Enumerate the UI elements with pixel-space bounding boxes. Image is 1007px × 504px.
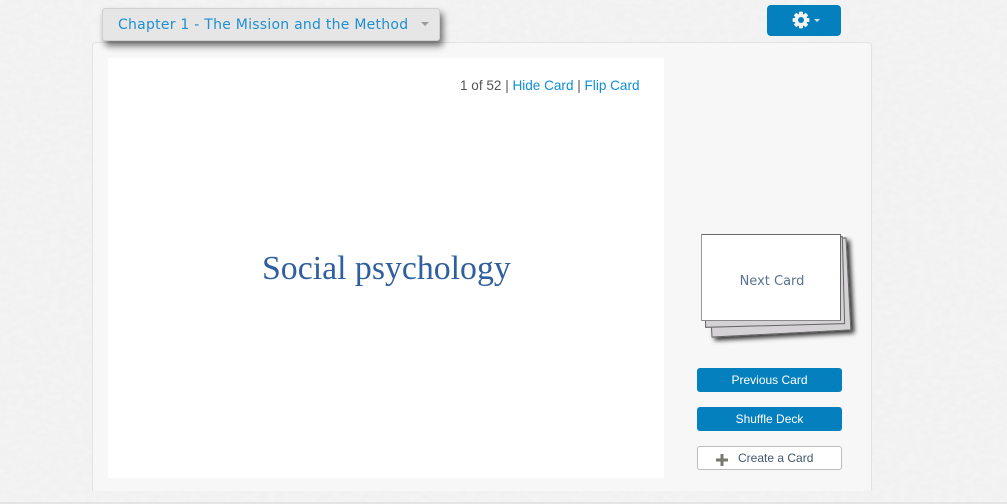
dropdown caret xyxy=(421,22,429,26)
settings caret xyxy=(814,19,820,22)
previous card button: Previous Card xyxy=(731,373,808,387)
icon: plus xyxy=(716,454,728,466)
card term: Social psychology xyxy=(262,250,511,287)
deck bottom card xyxy=(707,237,851,338)
create a card label: Create a Card xyxy=(738,451,813,465)
deck middle card xyxy=(703,236,845,328)
icon: gear xyxy=(792,12,810,28)
flashcard xyxy=(108,58,664,478)
previous card button xyxy=(697,368,842,392)
shuffle deck button: Shuffle Deck xyxy=(736,412,803,426)
chapter dropdown xyxy=(102,8,440,41)
main panel xyxy=(92,42,872,491)
deck top card xyxy=(701,234,841,321)
chapter title: Chapter 1 - The Mission and the Method xyxy=(118,17,408,33)
next card deck xyxy=(701,234,858,344)
shuffle deck button xyxy=(697,407,842,431)
next card label: Next Card xyxy=(740,274,804,289)
settings button xyxy=(767,5,841,36)
create a card button xyxy=(697,446,842,470)
card counter and links: 1 of 52 | Hide Card | Flip Card xyxy=(460,78,640,93)
